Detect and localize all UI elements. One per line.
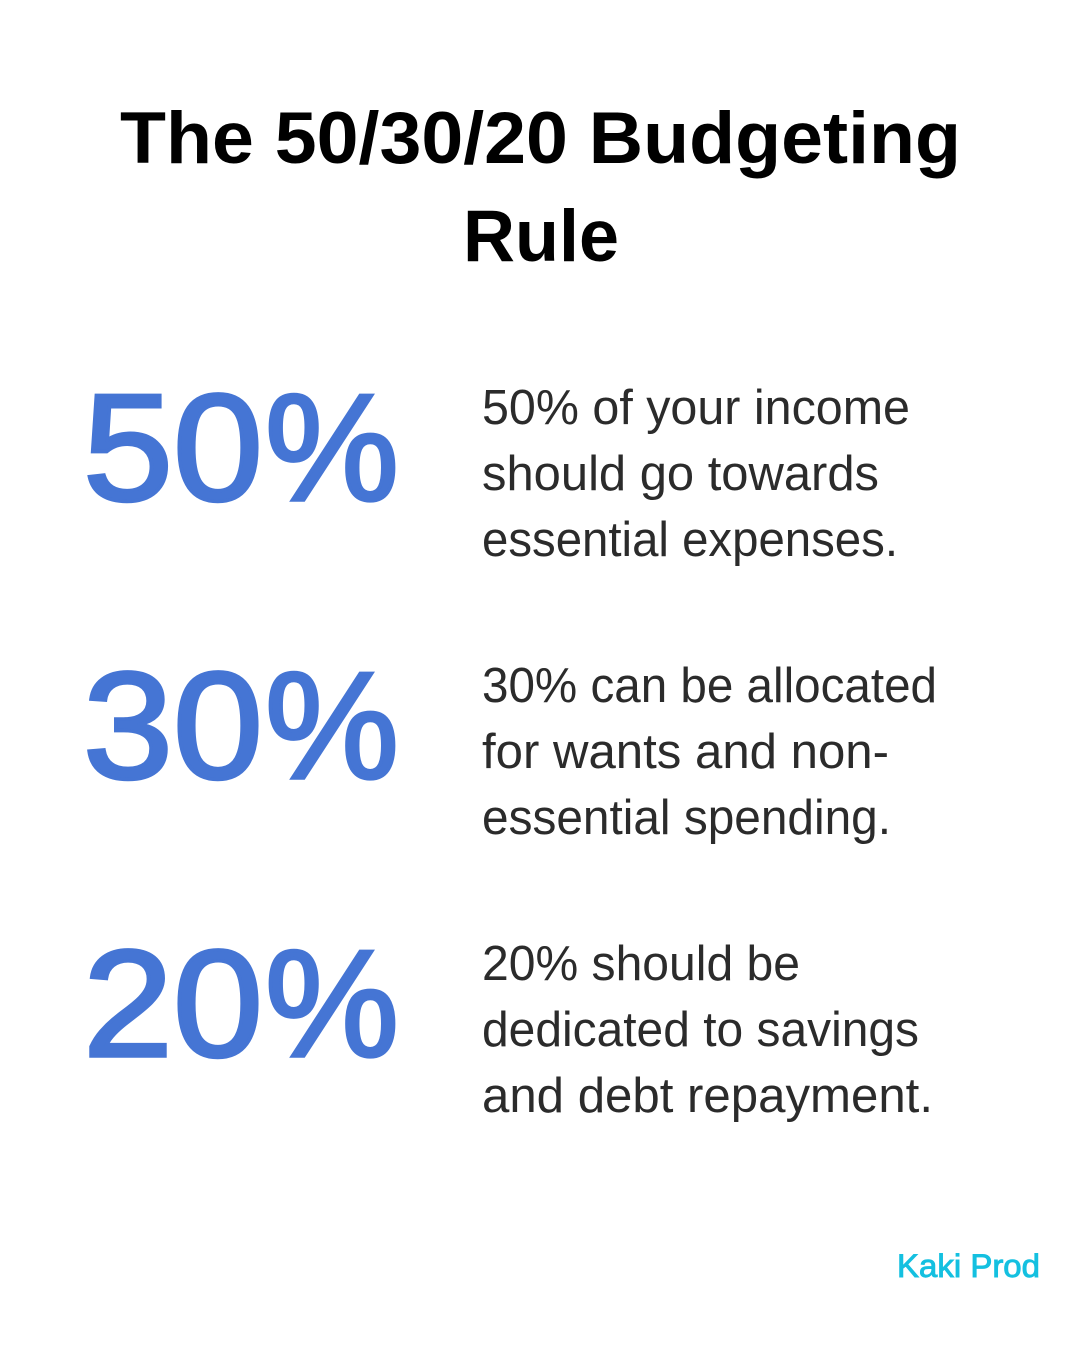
statistic: 20%: 20 (83, 919, 263, 1089)
description: 30% wants (482, 659, 937, 845)
description: 50% essential expenses (482, 381, 910, 567)
logo: Kaki Prod: Kaki Prod (897, 1248, 1040, 1284)
description: 50% essential expenses: should go towards (482, 447, 879, 501)
description: 20% savings and debt: 20% should be (482, 937, 800, 991)
title: Rule (463, 196, 619, 277)
statistic: 20%: % (265, 919, 399, 1089)
description: 50% essential expenses: 50% of your income (482, 381, 910, 435)
statistic: 30% (83, 641, 399, 811)
title (120, 98, 961, 277)
statistic: 50%: 50 (83, 363, 263, 533)
description: 30% wants: for wants and non- (482, 725, 889, 779)
statistic: 20% (83, 919, 399, 1089)
description: 30% wants: 30% can be allocated (482, 659, 937, 713)
statistic: 50% (83, 363, 399, 533)
description: 30% wants: essential spending. (482, 791, 891, 845)
statistic: 50%: % (265, 363, 399, 533)
statistic: 30%: % (265, 641, 399, 811)
description: 50% essential expenses: essential expenses. (482, 513, 898, 567)
title: The 50/30/20 Budgeting (120, 98, 961, 179)
statistic: 30%: 30 (83, 641, 263, 811)
description: 20% savings and debt (482, 937, 933, 1123)
description: 20% savings and debt: dedicated to savings (482, 1003, 919, 1057)
description: 20% savings and debt: and debt repayment. (482, 1069, 933, 1123)
